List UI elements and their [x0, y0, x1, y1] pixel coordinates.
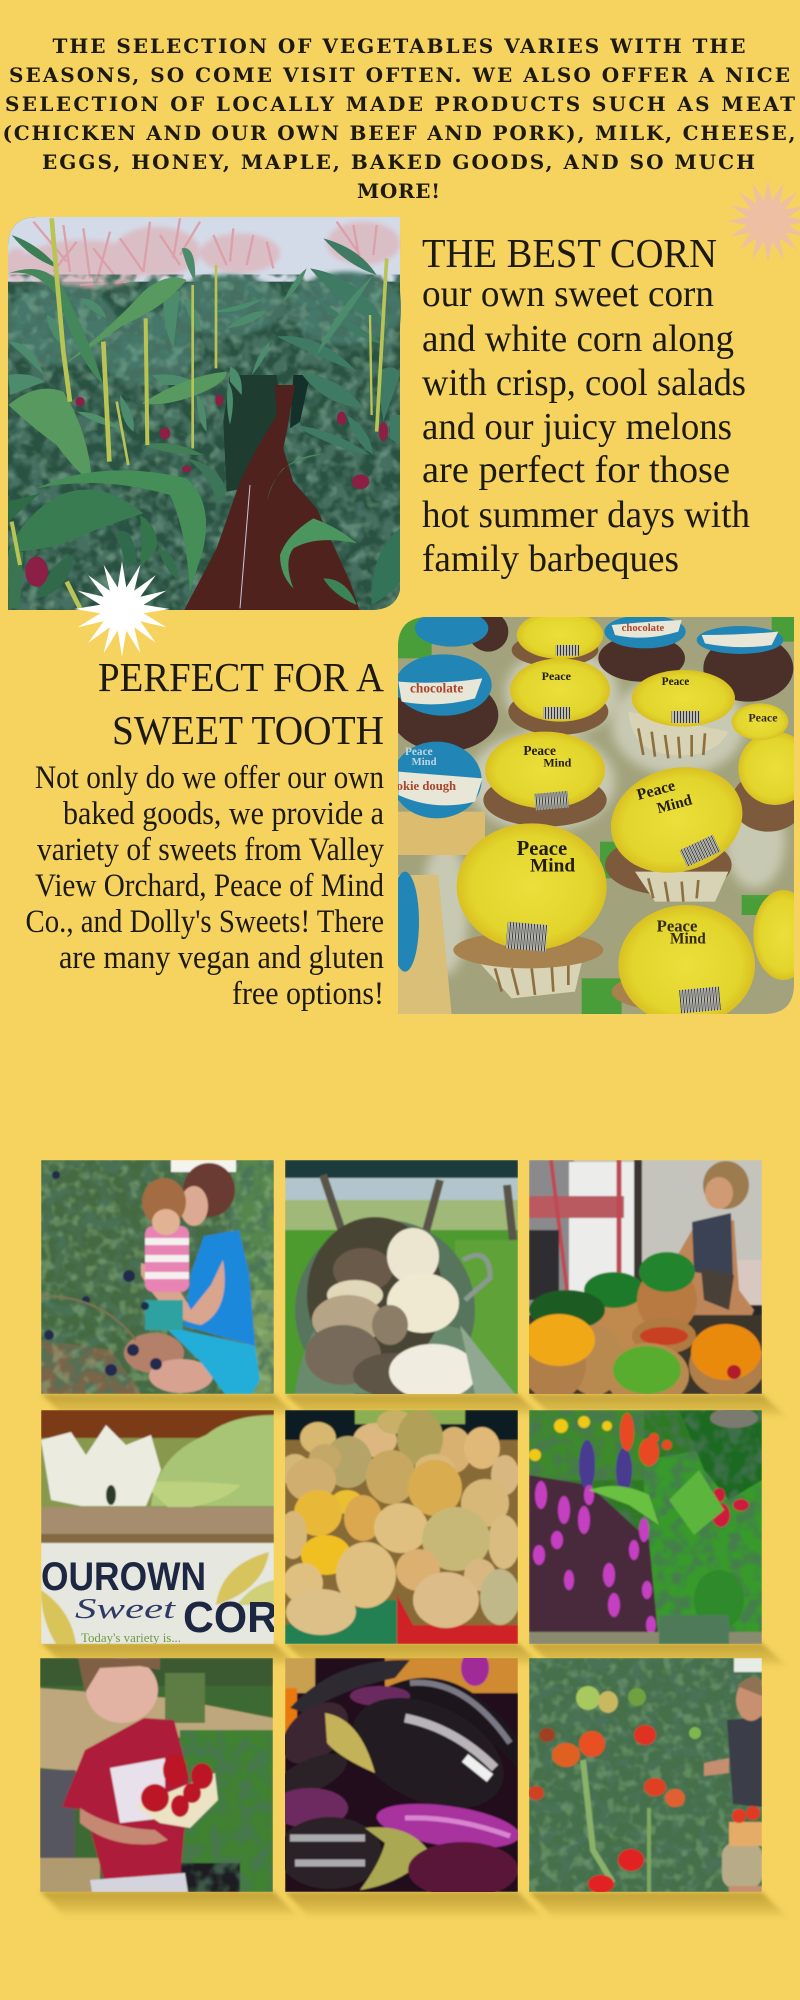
intro paragraph: MORE!	[357, 179, 440, 203]
heading: perfect for a sweet tooth	[98, 654, 384, 753]
intro paragraph	[2, 34, 796, 203]
photo: packaged muffins: Peace	[662, 676, 689, 688]
photo: packaged muffins: Peace	[405, 746, 433, 758]
photo: packaged muffins: Mind	[543, 756, 572, 770]
photo: eggplants	[285, 1658, 518, 1892]
photo: packaged muffins: chocolate	[622, 623, 665, 634]
intro paragraph: THE SELECTION OF VEGETABLES VARIES WITH THE	[52, 34, 746, 58]
photo: packaged muffins: Mind	[670, 930, 706, 947]
text block: corn description: are perfect for those	[422, 449, 730, 491]
text block: corn description: and our juicy melons	[422, 406, 732, 448]
photo: cantaloupe pile	[279, 1410, 520, 1644]
photo: boy with strawberries	[40, 1657, 273, 1892]
photo: packaged muffins: Peace	[635, 777, 677, 804]
photo: packaged muffins: Mind	[530, 856, 575, 877]
photo: packaged muffins: Peace	[748, 711, 778, 725]
text block: corn description: family barbeques	[422, 538, 679, 580]
text block: corn description: hot summer days with	[422, 494, 750, 536]
photo: our own sweet corn sign	[41, 1410, 278, 1645]
text block: sweets description: Co., and Dolly's Sweets! There	[26, 904, 384, 940]
intro paragraph: (CHICKEN AND OUR OWN BEEF AND PORK), MILK, CHEESE,	[2, 121, 796, 145]
photo: corn field rows	[0, 215, 403, 615]
photo: tomatoes and grower	[528, 1658, 766, 1893]
photo: our own sweet corn sign: COR	[183, 1593, 278, 1642]
text block: corn description	[422, 273, 750, 580]
text block: corn description: our own sweet corn	[422, 273, 714, 315]
heading: perfect for a sweet tooth: SWEET TOOTH	[112, 707, 384, 753]
heading: perfect for a sweet tooth: PERFECT FOR A	[98, 654, 384, 700]
photo: packaged muffins	[391, 610, 800, 1025]
heading: the best corn: THE BEST CORN	[422, 230, 717, 276]
photo: packaged muffins: Peace	[542, 669, 572, 683]
photo: packaged muffins: Peace	[523, 743, 556, 758]
text block: corn description: with crisp, cool salads	[422, 362, 746, 404]
text block: sweets description	[26, 760, 384, 1012]
intro paragraph: EGGS, HONEY, MAPLE, BAKED GOODS, AND SO MUCH	[42, 150, 755, 174]
text block: sweets description: Not only do we offer our own	[35, 760, 384, 796]
grid shadows	[40, 1394, 788, 1918]
photo: farmer with peppers	[522, 1160, 765, 1407]
text block: sweets description: baked goods, we provide a	[63, 796, 384, 832]
photo grid	[40, 1160, 788, 1918]
intro paragraph: SEASONS, SO COME VISIT OFTEN. WE ALSO OFFER A NICE	[9, 63, 790, 87]
text block: sweets description: variety of sweets from Valley	[37, 832, 384, 868]
photo: our own sweet corn sign: Sweet	[75, 1594, 177, 1625]
photo: picking blueberries	[41, 1160, 274, 1394]
photo: packaged muffins: Peace	[517, 838, 567, 860]
photo: flower garden	[529, 1408, 762, 1644]
photo: our own sweet corn sign: OUROWN	[41, 1555, 206, 1599]
photo: packaged muffins: Mind	[655, 791, 694, 817]
photo: our own sweet corn sign: Today's variety is...	[81, 1630, 181, 1645]
photo: packaged muffins: Mind	[412, 757, 437, 768]
intro paragraph: SELECTION OF LOCALLY MADE PRODUCTS SUCH AS MEAT	[5, 92, 795, 116]
text block: sweets description: free options!	[232, 976, 384, 1012]
text block: corn description: and white corn along	[422, 318, 734, 360]
icon: pink starburst	[727, 180, 800, 262]
text block: sweets description: are many vegan and gluten	[59, 940, 384, 976]
photo: mushrooms in basket	[285, 1160, 518, 1400]
text block: sweets description: View Orchard, Peace of Mind	[35, 868, 384, 904]
icon: white starburst	[74, 561, 170, 657]
photo: packaged muffins: okie dough	[397, 779, 456, 793]
photo: packaged muffins: chocolate	[410, 680, 463, 695]
photo: packaged muffins: Peace	[657, 917, 697, 936]
